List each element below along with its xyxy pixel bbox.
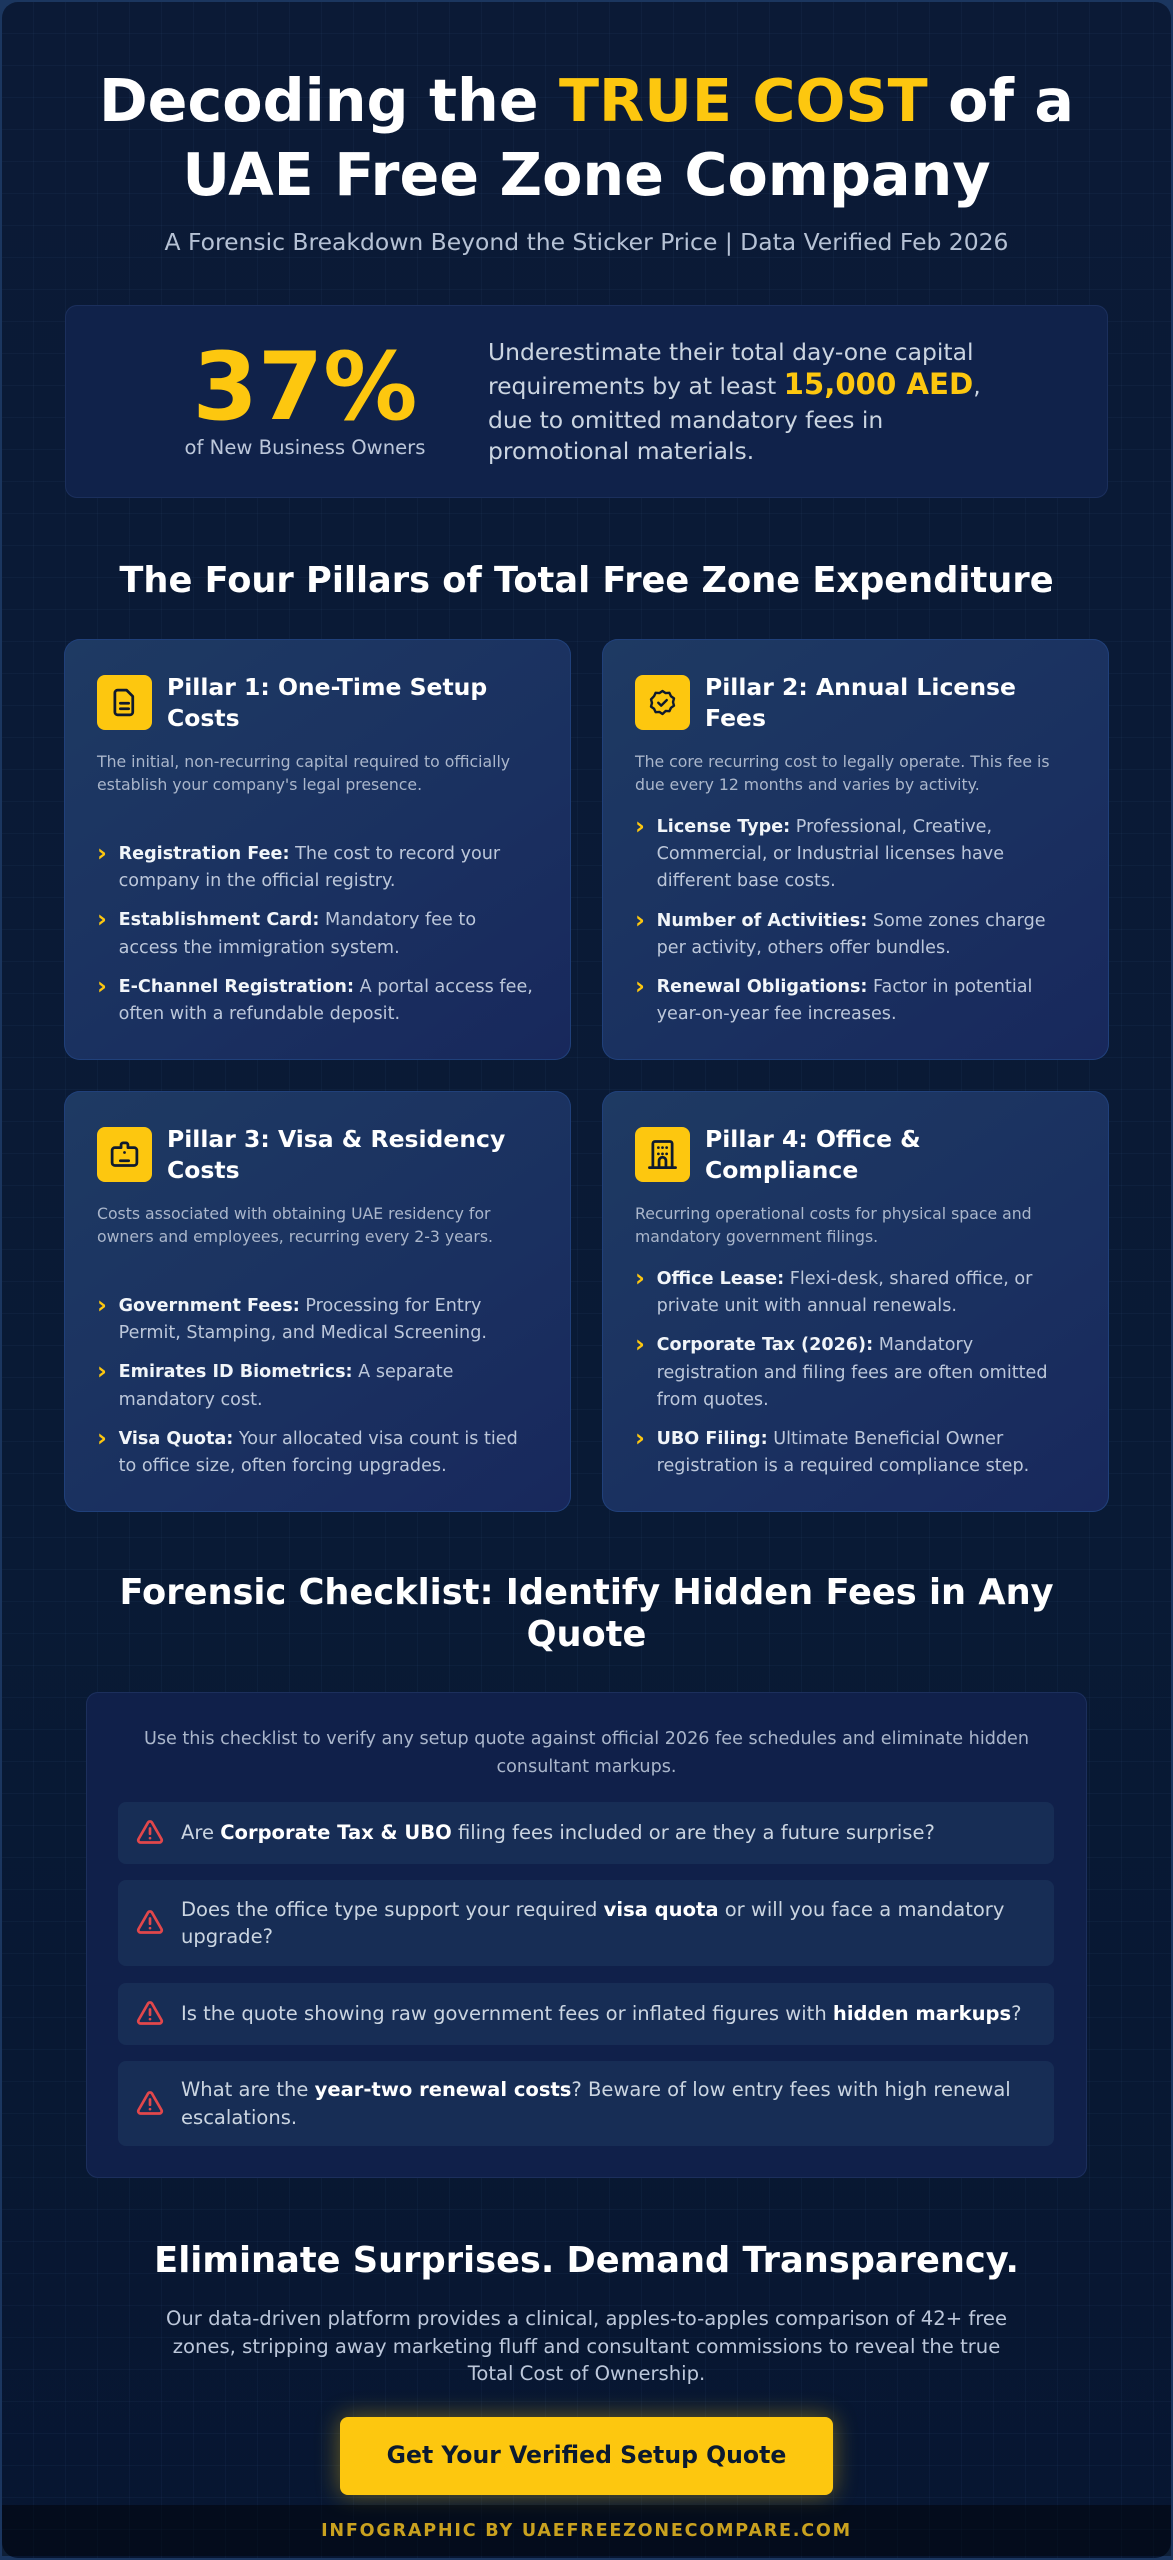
pillar 1 list: Registration Fee: The cost to record your [119, 844, 500, 864]
pillar 1 list: Establishment Card: Mandatory fee to [119, 910, 476, 930]
checklist item 4: escalations. [181, 2106, 297, 2128]
panel: checklist [86, 1692, 1087, 2178]
pillar 3 list: › [97, 1291, 107, 1319]
title: UAE Free Zone Company [182, 141, 991, 209]
checklist item 2: upgrade? [181, 1925, 273, 1948]
pillar 4 list: Office Lease: Flexi-desk, shared office, or [657, 1269, 1032, 1289]
section heading: forensic checklist: Forensic Checklist: Identify Hidden Fees in Any [119, 1572, 1054, 1613]
pillar 2 heading: Fees [705, 704, 766, 732]
call to action text: Our data-driven platform provides a clinical, apples-to-apples comparison of 42+ free [166, 2307, 1007, 2330]
pillar 3 description [97, 1204, 493, 1246]
pillar 3 list: Emirates ID Biometrics: A separate [119, 1362, 454, 1382]
pillar 1 list: › [97, 905, 107, 933]
panel: pillar 2 [602, 639, 1109, 1060]
checklist item 2 [118, 1880, 1054, 1966]
checklist intro: consultant markups. [496, 1756, 676, 1776]
footer: INFOGRAPHIC BY UAEFREEZONECOMPARE.COM [321, 2521, 852, 2541]
pillar 2 list: › [635, 812, 645, 840]
icon: document [97, 675, 152, 730]
pillar 4 list: registration is a required compliance step. [657, 1456, 1029, 1476]
icon: verified badge [635, 675, 690, 730]
pillar 1 list [97, 839, 533, 1024]
pillar 3 list: Visa Quota: Your allocated visa count is tied [119, 1429, 518, 1449]
pillar 2 list [635, 812, 1046, 1024]
stat text: due to omitted mandatory fees in [488, 406, 883, 434]
pillar 3 list: › [97, 1357, 107, 1385]
pillar 2 heading [705, 673, 1016, 732]
pillar 2 heading: Pillar 2: Annual License [705, 673, 1016, 701]
call to action text: Total Cost of Ownership. [468, 2362, 705, 2385]
pillar 2 list: Number of Activities: Some zones charge [657, 911, 1046, 931]
checklist item 4: What are the year-two renewal costs? Beware of low entry fees with high renewal [181, 2078, 1011, 2101]
checklist item 1 [118, 1802, 1054, 1864]
stat text: promotional materials. [488, 436, 754, 464]
pillar 2 list: year-on-year fee increases. [657, 1004, 897, 1024]
pillar 1 list: often with a refundable deposit. [119, 1004, 400, 1024]
pillar 4 list: › [635, 1330, 645, 1358]
pillar 2 description: due every 12 months and varies by activity. [635, 774, 980, 794]
stat label: of New Business Owners [185, 436, 425, 459]
pillar 3 list: › [97, 1424, 107, 1452]
pillar 1 description: establish your company's legal presence. [97, 774, 422, 794]
pillar 3 list: Government Fees: Processing for Entry [119, 1296, 481, 1316]
pillar 3 heading: Pillar 3: Visa & Residency [167, 1125, 505, 1153]
pillar 1 description [96, 752, 510, 794]
stat text: requirements by at least 15,000 AED, [488, 367, 981, 401]
pillar 3 description: Costs associated with obtaining UAE residency for [97, 1204, 490, 1222]
pillar 4 list: private unit with annual renewals. [657, 1296, 957, 1316]
checklist item 4 [118, 2061, 1054, 2146]
pillar 2 list: › [635, 906, 645, 934]
pillar 3 list: to office size, often forcing upgrades. [119, 1456, 447, 1476]
panel: key statistic [65, 305, 1108, 498]
panel: pillar 4 [602, 1091, 1109, 1512]
title [99, 67, 1074, 209]
pillar 4 heading: Pillar 4: Office & [705, 1125, 921, 1153]
checklist intro: Use this checklist to verify any setup quote against official 2026 fee schedules and eliminate hidden [144, 1728, 1029, 1748]
pillar 1 heading: Pillar 1: One-Time Setup [167, 673, 487, 701]
pillar 3 list [97, 1291, 518, 1476]
stat text: Underestimate their total day-one capital [488, 338, 973, 366]
pillar 4 list [635, 1264, 1048, 1476]
stat number: 37% [192, 333, 418, 442]
call to action text: zones, stripping away marketing fluff and consultant commissions to reveal the true [173, 2334, 1000, 2358]
section heading: forensic checklist [119, 1572, 1054, 1654]
pillar 3 description: owners and employees, recurring every 2-3 years. [97, 1226, 493, 1246]
pillar 2 list: per activity, others offer bundles. [657, 938, 951, 958]
pillar 4 description: mandatory government filings. [635, 1226, 878, 1246]
pillar 1 heading: Costs [167, 704, 240, 732]
pillar 4 heading [705, 1125, 921, 1184]
checklist item 3 [118, 1983, 1054, 2045]
pillar 4 list: UBO Filing: Ultimate Beneficial Owner [657, 1429, 1003, 1449]
pillar 2 description [634, 752, 1050, 794]
pillar 3 heading [167, 1125, 505, 1184]
pillar 1 list: E-Channel Registration: A portal access fee, [119, 977, 533, 997]
pillar 4 list: › [635, 1424, 645, 1452]
pillar 4 list: from quotes. [657, 1390, 769, 1410]
pillar 4 description [635, 1204, 1032, 1246]
footer [2, 2505, 1171, 2556]
button: get quote: Get Your Verified Setup Quote [387, 2441, 786, 2469]
pillar 4 list: › [635, 1264, 645, 1292]
pillar 2 list: › [635, 972, 645, 1000]
call to action heading: Eliminate Surprises. Demand Transparency. [154, 2240, 1019, 2281]
pillar 4 list: Corporate Tax (2026): Mandatory [657, 1335, 973, 1355]
pillar 2 list: different base costs. [657, 871, 836, 891]
pillar 2 list: License Type: Professional, Creative, [657, 817, 992, 837]
subtitle: A Forensic Breakdown Beyond the Sticker Price | Data Verified Feb 2026 [165, 228, 1008, 256]
panel: pillar 1 [64, 639, 571, 1060]
pillar 1 list: access the immigration system. [119, 938, 400, 958]
stat text [488, 338, 981, 464]
pillar 2 list: Renewal Obligations: Factor in potential [657, 977, 1032, 997]
pillar 2 list: Commercial, or Industrial licenses have [657, 844, 1004, 864]
icon: office building [635, 1127, 690, 1182]
checklist item 3: Is the quote showing raw government fees or inflated figures with hidden markups? [181, 2002, 1021, 2025]
pillar 1 description: The initial, non-recurring capital required to officially [97, 752, 510, 770]
pillar 1 heading [167, 673, 487, 732]
section heading: four pillars: The Four Pillars of Total Free Zone Expenditure [119, 560, 1054, 601]
title: Decoding the TRUE COST of a [99, 67, 1074, 135]
pillar 3 list: Permit, Stamping, and Medical Screening. [119, 1323, 487, 1343]
checklist intro [144, 1728, 1029, 1776]
section heading: forensic checklist: Quote [527, 1614, 646, 1654]
pillar 1 list: › [97, 839, 107, 867]
pillar 3 list: mandatory cost. [119, 1390, 263, 1410]
icon: id badge [97, 1127, 152, 1182]
pillar 2 description: The core recurring cost to legally operate. This fee is [635, 752, 1050, 770]
checklist item 1: Are Corporate Tax & UBO filing fees included or are they a future surprise? [181, 1821, 935, 1844]
panel: pillar 3 [64, 1091, 571, 1512]
button: get quote [340, 2417, 833, 2495]
pillar 1 list: › [97, 972, 107, 1000]
pillar 4 heading: Compliance [705, 1156, 858, 1184]
pillar 1 list: company in the official registry. [119, 871, 396, 891]
checklist item 2: Does the office type support your required visa quota or will you face a mandatory [181, 1898, 1004, 1921]
pillar 3 heading: Costs [167, 1156, 240, 1184]
call to action text [166, 2307, 1007, 2385]
pillar 4 description: Recurring operational costs for physical space and [635, 1204, 1032, 1222]
pillar 4 list: registration and filing fees are often omitted [657, 1363, 1048, 1383]
